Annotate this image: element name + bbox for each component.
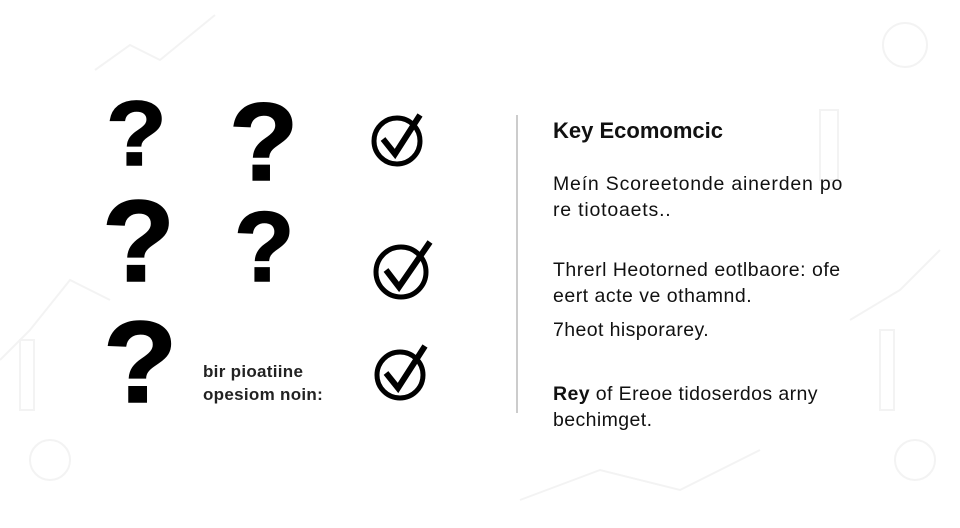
left caption: opesiom noin: [203, 385, 323, 404]
text block 1: re tiotoaets.. [553, 199, 672, 221]
text block 4: bechimget. [553, 409, 652, 431]
heading: Key Ecomomcic [553, 118, 723, 143]
text block 1: Meín Scoreetonde ainerden po [553, 173, 843, 195]
icon: check r3 [377, 346, 425, 398]
text block 4 [553, 383, 818, 431]
left caption [203, 362, 323, 404]
check icons [372, 113, 432, 400]
icon: question mark r1c1: ? [106, 82, 167, 185]
text block 1 [553, 173, 843, 221]
icon: check r2 [376, 242, 430, 297]
icon: question mark r3c1: ? [103, 298, 177, 427]
text block 2: eert acte ve othamnd. [553, 285, 752, 307]
text block 3: 7heot hisporarey. [553, 319, 709, 341]
text block 2: Threrl Heotorned eotlbaore: ofe [553, 259, 841, 281]
divider [516, 115, 518, 413]
icon: question mark r2c1: ? [102, 176, 175, 306]
text block 4: Rey of Ereoe tidoserdos arny [553, 383, 818, 405]
right text panel [553, 118, 843, 431]
icon: question mark r2c2: ? [234, 191, 294, 302]
left caption: bir pioatiine [203, 362, 303, 381]
text block 2 [553, 259, 841, 307]
icon grid: question marks [102, 81, 298, 427]
icon: check r1 [374, 115, 420, 164]
icon: question mark r1c2: ? [229, 81, 298, 204]
